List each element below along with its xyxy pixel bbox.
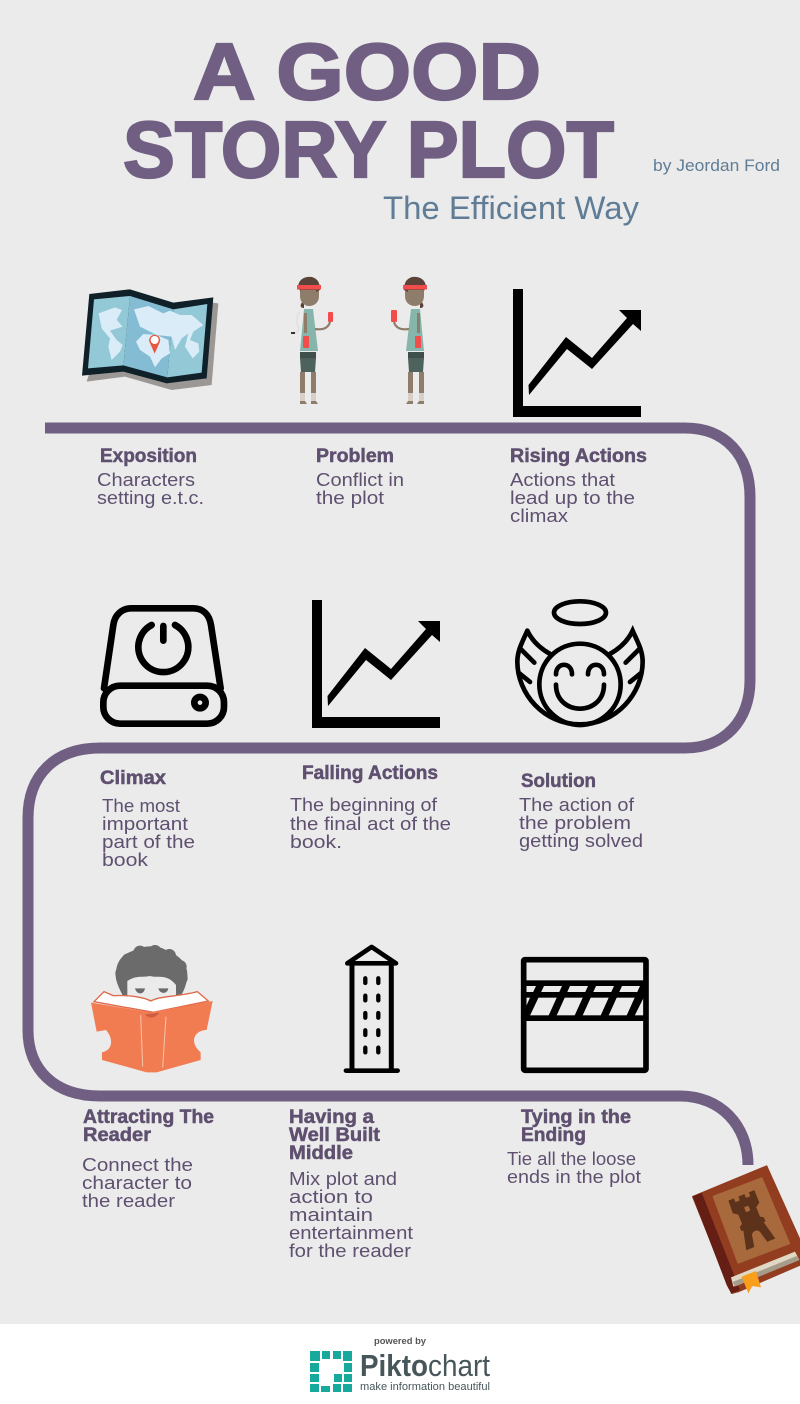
Rising Actions text: climax — [510, 506, 568, 526]
Climax text: book — [102, 850, 149, 870]
Having a Well Built Middle text: Mix plot and — [289, 1169, 397, 1189]
Having a Well Built Middle text: entertainment — [289, 1223, 413, 1243]
icon: book — [693, 1166, 800, 1293]
byline: by Jeordan Ford — [653, 156, 780, 175]
Problem text: Problem — [316, 446, 394, 467]
Problem text: Conflict in — [316, 470, 404, 490]
Having a Well Built Middle text: maintain — [289, 1205, 373, 1225]
Piktochart logo — [310, 1336, 490, 1393]
Falling Actions text — [290, 763, 451, 852]
Attracting The Reader text — [82, 1107, 214, 1211]
Solution text: the problem — [519, 813, 631, 833]
Piktochart logo: make information beautiful — [360, 1381, 490, 1393]
footer band — [0, 1324, 800, 1404]
Attracting The Reader text: character to — [82, 1173, 192, 1193]
Having a Well Built Middle text: Middle — [289, 1143, 353, 1164]
Climax text: part of the — [102, 832, 195, 852]
icon: falling chart — [312, 600, 440, 728]
Attracting The Reader text: Attracting The — [83, 1107, 214, 1128]
Climax text: Climax — [100, 768, 166, 789]
icon: clapperboard — [521, 960, 646, 1070]
Attracting The Reader text: Connect the — [82, 1155, 193, 1175]
Exposition text: setting e.t.c. — [97, 488, 204, 508]
Climax text: The most — [102, 796, 180, 816]
logo mark — [310, 1351, 352, 1392]
Rising Actions text — [510, 446, 647, 526]
Having a Well Built Middle text — [289, 1107, 413, 1261]
icon: person right — [391, 277, 427, 404]
winding path — [28, 428, 750, 1165]
Rising Actions text: Rising Actions — [510, 446, 647, 467]
Solution text — [519, 771, 643, 851]
Exposition text: Characters — [97, 470, 195, 490]
icon: angel smiley — [517, 601, 643, 725]
icon: map — [82, 289, 218, 390]
Falling Actions text: Falling Actions — [302, 763, 438, 784]
Piktochart logo: chart — [428, 1348, 490, 1383]
Solution text: getting solved — [519, 831, 643, 851]
Having a Well Built Middle text: action to — [289, 1187, 373, 1207]
Tying in the Ending text: Tying in the — [521, 1107, 631, 1128]
Having a Well Built Middle text: Well Built — [289, 1125, 381, 1146]
title: A GOOD — [193, 27, 541, 116]
icon: person left — [291, 277, 333, 404]
Piktochart logo: Pikto — [360, 1348, 428, 1383]
Attracting The Reader text: Reader — [83, 1125, 152, 1146]
Rising Actions text: lead up to the — [510, 488, 635, 508]
Attracting The Reader text: the reader — [82, 1191, 175, 1211]
Piktochart logo: powered by — [374, 1336, 427, 1347]
Exposition text: Exposition — [100, 446, 197, 467]
icon: power drive — [103, 608, 224, 724]
icon: reader — [91, 945, 213, 1072]
Exposition text — [97, 446, 204, 508]
Tying in the Ending text — [507, 1107, 641, 1187]
Falling Actions text: the final act of the — [290, 814, 451, 834]
Having a Well Built Middle text: for the reader — [289, 1241, 411, 1261]
Climax text: important — [102, 814, 188, 834]
Tying in the Ending text: Ending — [521, 1125, 586, 1146]
subtitle: The Efficient Way — [383, 190, 639, 226]
Solution text: Solution — [521, 771, 596, 792]
icon: tower — [346, 947, 398, 1071]
Rising Actions text: Actions that — [510, 470, 615, 490]
Problem text — [316, 446, 404, 508]
title — [123, 27, 614, 194]
Tying in the Ending text: Tie all the loose — [507, 1149, 636, 1169]
Tying in the Ending text: ends in the plot — [507, 1167, 641, 1187]
title: STORY PLOT — [123, 105, 614, 194]
Having a Well Built Middle text: Having a — [289, 1107, 374, 1128]
Falling Actions text: The beginning of — [290, 795, 438, 815]
icon: rising chart — [513, 289, 641, 417]
Climax text — [100, 768, 195, 870]
Solution text: The action of — [519, 795, 635, 815]
Falling Actions text: book. — [290, 832, 342, 852]
Problem text: the plot — [316, 488, 384, 508]
